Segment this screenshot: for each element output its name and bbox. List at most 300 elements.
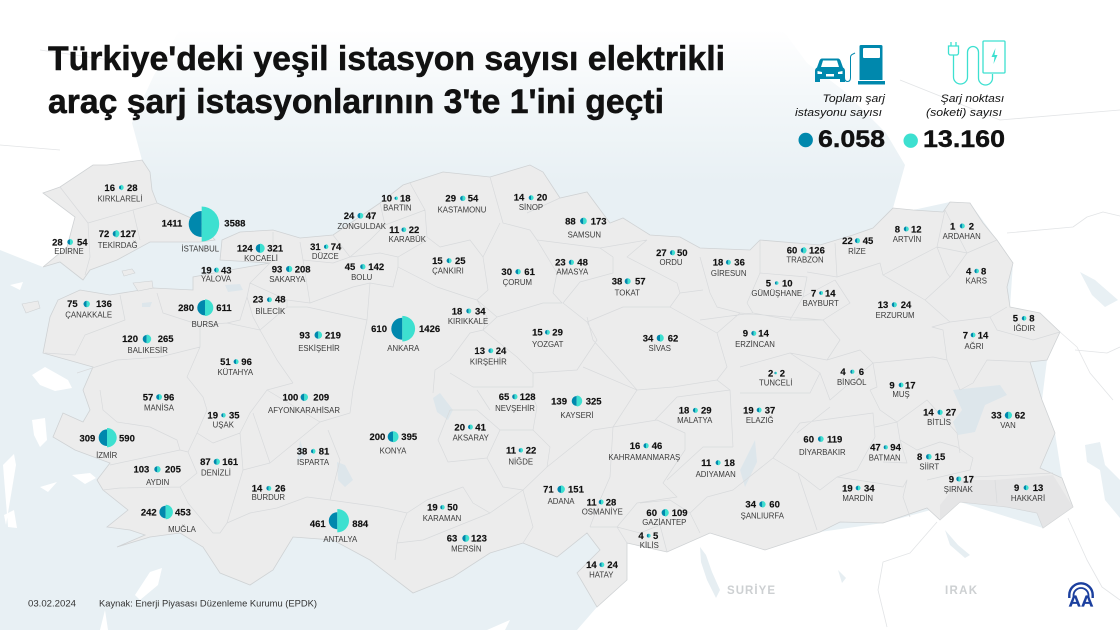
legend: total stations [795,45,886,153]
province: Eskişehir [298,330,341,353]
province: Kilis: 4 [638,531,644,542]
province: Sivas: SİVAS [649,344,671,353]
province: Elazığ: 37 [765,405,775,416]
province: Bolu: BOLU [351,273,373,282]
province: Eskişehir: 219 [325,330,341,341]
province: Antalya [310,509,369,544]
province: Siirt: SİİRT [919,462,939,472]
province: Mardin [842,483,875,503]
province: Kahramanmaraş: 16 [630,441,640,452]
province: Düzce: 74 [331,242,342,253]
province: Isparta: ISPARTA [297,458,330,467]
province: Batman: BATMAN [869,454,901,462]
province: İstanbul: İSTANBUL [182,244,220,254]
province: Kütahya: 51 [220,357,231,368]
province: Edirne: 28 [52,237,63,248]
province: Kırklareli: KIRKLARELİ [97,194,143,203]
province: Kastamonu: KASTAMONU [438,206,487,214]
province: Ordu: 50 [677,248,688,259]
province: Artvin [893,224,922,244]
province: Mersin: MERSİN [451,544,481,554]
province: Denizli: 161 [222,457,239,468]
province: Adana [543,485,585,506]
province: Rize: 45 [863,236,874,247]
province: Afyonkarahisar: AFYONKARAHİSAR [268,406,340,415]
title: araç şarj istasyonlarının 3'te 1'ini geçti [48,83,664,121]
province: Bartın: BARTIN [383,204,412,212]
icon: car and fuel pump [815,45,885,84]
province: Erzincan: 14 [758,329,770,340]
province: Kars: KARS [966,276,987,286]
province: Tunceli [759,368,792,388]
province: Aksaray [453,422,490,442]
province: Sinop [514,193,547,212]
province: Çanakkale [65,299,112,320]
province: Adıyaman: 18 [724,458,735,469]
province: Kütahya: KÜTAHYA [217,368,254,377]
province: Adana: 151 [568,485,585,496]
province: Muş [889,380,916,399]
province: Giresun: 18 [713,258,723,269]
province: Diyarbakır [799,434,846,457]
province: Gaziantep: GAZİANTEP [642,518,686,527]
province: Bayburt: BAYBURT [803,299,839,308]
province: Tunceli: 2 [780,368,785,379]
province: Balıkesir: BALIKESİR [128,346,168,355]
province: Van: 33 [991,411,1002,422]
province: Kırklareli: 28 [127,183,138,194]
province: Niğde: 11 [506,446,517,457]
province: Kahramanmaraş: 46 [652,441,662,452]
icon: plug and battery [948,41,1005,85]
province: Trabzon: TRABZON [786,256,824,264]
province: Muğla: MUĞLA [168,525,197,534]
province: Balıkesir: 120 [122,334,138,345]
province: Tokat: 57 [635,277,646,288]
province: Bolu [345,262,384,282]
province: Ordu: 27 [656,248,667,259]
province: Rize: RİZE [848,247,866,256]
province: Yozgat: 29 [552,328,563,339]
province: Bilecik: BİLECİK [255,307,286,316]
province: Bayburt: 7 [811,288,816,299]
province: Karaman: 19 [427,503,438,514]
province: Sinop: 14 [514,193,525,204]
province: Bayburt: 14 [825,288,836,299]
province: Hakkari: HAKKARİ [1011,494,1045,503]
province: Trabzon [786,246,825,264]
province: İzmir: 590 [119,433,135,444]
province: Zonguldak: ZONGULDAK [337,222,387,231]
province: Düzce [310,242,342,261]
province: Ardahan [943,221,981,241]
province: Bilecik: 23 [253,294,263,306]
province: Isparta: 81 [319,447,330,458]
province: Antalya: 461 [310,519,326,530]
province: Edirne [52,237,88,256]
province: Osmaniye: 28 [606,497,616,508]
province: Balıkesir: 265 [158,334,174,345]
province: Kırşehir: 13 [474,346,485,357]
province: Afyonkarahisar: 209 [313,393,329,404]
Turkey land [43,160,215,280]
province: Erzincan [735,329,775,349]
province: Trabzon: 126 [809,246,825,257]
legend: charge points: (soketi) sayısı [926,107,1002,119]
province: Kars: 4 [966,266,972,277]
province: Konya: 200 [369,432,385,443]
province: Iğdır: IĞDIR [1013,324,1035,333]
province: Ağrı: AĞRI [964,342,984,351]
province: İstanbul: 3588 [224,219,245,230]
province: Ankara: 1426 [419,324,440,335]
province: Sivas: 62 [668,333,678,344]
province: Çankırı: 15 [432,256,443,267]
province: Düzce: DÜZCE [312,252,339,261]
province: Yozgat [532,328,564,349]
province: Ordu: ORDU [660,258,683,267]
province: Antalya: 884 [352,519,369,530]
province: Tekirdağ: 72 [99,229,109,240]
province: Aydın [133,465,182,487]
province: Kars [966,266,987,286]
province: Burdur: 14 [252,484,263,495]
province: İzmir [79,428,135,460]
province: Giresun: GİRESUN [711,269,746,278]
province: Kırşehir [470,346,507,366]
province: Sinop: 20 [537,193,547,204]
province: Zonguldak: 47 [366,211,376,222]
province: Karabük: 11 [389,225,400,236]
province: Hatay: 14 [586,560,597,571]
province: Osmaniye: 11 [587,497,597,508]
province: Artvin: 12 [911,224,922,235]
province: Karaman [423,503,461,523]
province: Giresun [711,258,746,278]
province: Malatya: 18 [679,406,689,417]
legend: total stations: Toplam şarj [822,93,886,105]
province: Mardin: 34 [864,483,875,494]
province: Denizli: 87 [200,457,211,468]
province: Bitlis: 27 [946,408,956,419]
province: Kahramanmaraş [608,441,680,462]
province: Muğla: 453 [175,507,191,518]
province: Uşak: 35 [229,411,240,422]
province: Kırıkkale: 18 [452,306,462,317]
province: Mersin: 63 [447,534,457,545]
province: Gaziantep: 60 [646,508,657,519]
province: Adana: ADANA [548,497,575,506]
province: Denizli: DENİZLİ [201,468,231,478]
province: Malatya [677,406,713,425]
province: Kırşehir: 24 [496,346,507,357]
province: Zonguldak [337,211,387,231]
province: Van: 62 [1015,411,1025,422]
legend: charge points: 13.160 [923,126,1005,153]
legend: charge points: Şarj noktası [941,93,1004,105]
province: Tekirdağ: 127 [120,229,136,240]
province: Şanlıurfa [741,500,785,520]
province: Malatya: 29 [701,406,712,417]
province: Nevşehir: 65 [499,392,510,403]
province: Aksaray: AKSARAY [453,434,490,442]
province: Muş: 17 [905,380,916,391]
province: Uşak: 19 [207,411,218,422]
province: Şırnak: 9 [949,474,954,485]
province: Çankırı: ÇANKIRI [432,266,464,276]
province: Kırklareli [97,183,143,203]
title: Türkiye'deki yeşil istasyon sayısı elektrikli [48,40,725,78]
province: Samsun: 173 [591,216,607,227]
province: Amasya: AMASYA [556,268,589,276]
province: Manisa: 96 [164,392,174,403]
province: Elazığ [743,405,775,425]
province: Kırıkkale [448,306,488,326]
province: Ankara: ANKARA [387,344,420,353]
province: Muğla: 242 [141,507,157,518]
province: Siirt [917,452,946,472]
province: Ardahan: 2 [969,221,974,232]
province: Sakarya [269,264,311,284]
province: Hakkari: 9 [1014,483,1019,494]
province: Sakarya: 93 [272,264,282,275]
province: Malatya: MALATYA [677,416,713,425]
province: Karaman: 50 [447,503,458,514]
province: Sivas [643,333,678,353]
province: Sakarya: 208 [295,264,311,275]
province: Konya [369,431,418,456]
province: Bayburt [803,288,839,308]
province: Adıyaman: ADIYAMAN [696,470,736,479]
province: İstanbul: 1411 [162,219,183,230]
province: Karabük [389,225,427,244]
province: Kayseri: KAYSERİ [560,411,594,420]
province: Gaziantep [642,508,688,527]
province: Aydın: 103 [133,465,149,476]
province: Mersin: 123 [471,534,487,545]
province: Ağrı: 7 [963,330,968,341]
province: Muş: 9 [889,380,895,391]
province: Siirt: 8 [917,452,922,463]
province: Amasya [555,258,589,276]
province: Sivas: 34 [643,333,654,344]
province: Burdur: BURDUR [252,493,285,502]
province: Bitlis: 14 [923,408,934,419]
province: Bilecik [253,294,286,316]
province: Hakkari: 13 [1033,483,1043,494]
province: Şırnak: ŞIRNAK [944,485,974,494]
province: Karabük: KARABÜK [389,235,427,244]
province: Bartın [381,194,412,212]
province: Konya: 395 [401,432,418,443]
province: Erzurum: 13 [878,300,888,311]
province: Düzce: 31 [310,242,321,253]
province: Nevşehir: NEVŞEHİR [495,404,535,413]
province: Hatay: 24 [607,560,619,571]
province: Ankara [371,316,440,353]
province: Kocaeli: 321 [267,244,284,255]
province: Osmaniye [582,497,623,516]
province: Kars: 8 [981,266,986,277]
province: Edirne: 54 [77,237,88,248]
province: Balıkesir [122,334,174,355]
province: İstanbul [162,206,245,254]
province: Kastamonu: 54 [468,194,479,205]
province: Tokat: TOKAT [615,288,640,298]
province: Mardin: 19 [842,483,853,494]
province: Çanakkale: ÇANAKKALE [65,310,112,320]
province: Afyonkarahisar [268,393,340,415]
province: Uşak [207,411,240,430]
province: Erzurum: ERZURUM [876,311,914,320]
province: Gümüşhane [751,278,802,298]
province: Samsun [565,216,607,240]
province: Çankırı [432,256,466,276]
province: Iğdır: 8 [1029,314,1035,325]
province: Kocaeli: KOCAELİ [244,254,278,263]
province: Yozgat: YOZGAT [532,340,564,349]
province: Kayseri [551,396,602,420]
province: Kastamonu: 29 [445,194,456,205]
province: Bursa [178,299,232,329]
province: Diyarbakır: 119 [827,434,842,445]
province: Şırnak [944,474,974,494]
province: Artvin: ARTVİN [893,235,921,244]
province: Niğde [506,446,536,466]
province: Rize: 22 [842,236,853,247]
province: Yalova: 43 [221,265,232,276]
province: Bursa: 280 [178,303,194,314]
province: Burdur: 26 [275,484,286,495]
province: Uşak: UŞAK [213,420,235,430]
province: Zonguldak: 24 [344,211,355,222]
province: Eskişehir: ESKİŞEHİR [298,344,340,353]
province: Muğla [141,505,197,534]
province: Kocaeli: 124 [237,244,253,255]
province: Manisa: 57 [143,392,153,403]
province: Aydın: 205 [165,465,182,476]
province: Isparta [297,447,330,467]
province: Adıyaman: 11 [701,458,712,469]
province: Elazığ: ELAZIĞ [746,416,774,425]
province: Yozgat: 15 [532,328,543,339]
province: Kocaeli [237,244,284,263]
province: Gümüşhane: 10 [782,278,793,289]
province: Isparta: 38 [297,447,307,458]
source: Kaynak: Enerji Piyasası Düzenleme Kurumu (EPDK) [99,598,317,610]
province: Sakarya: SAKARYA [269,275,306,284]
province: Batman: 94 [890,443,902,454]
province: Çorum: 30 [501,267,512,278]
legend: total stations: 6.058 [818,126,885,153]
province: Ardahan: 1 [950,221,956,232]
icon: AA logo [1068,583,1094,610]
province: Hatay: HATAY [589,570,614,580]
province: Aksaray: 41 [475,422,487,433]
province: Batman: 47 [870,443,881,454]
province: Artvin: 8 [895,224,900,235]
province: Edirne: EDİRNE [54,247,84,256]
province: Erzincan: ERZİNCAN [735,340,775,349]
province: Çorum: 61 [524,267,536,278]
province: Kırklareli: 16 [104,183,115,194]
province: Ankara: 610 [371,324,387,335]
province: Gümüşhane: 5 [766,278,772,289]
province: İzmir: 309 [79,433,95,444]
legend: total stations: istasyonu sayısı [795,107,882,119]
province: Tokat [612,277,646,298]
label: Suriye: SURİYE [727,584,775,597]
date: 03.02.2024 [28,598,77,610]
province: Şanlıurfa: ŞANLIURFA [741,512,785,520]
province: Giresun: 36 [734,258,745,269]
province: Ağrı: 14 [978,330,989,341]
province: Kırşehir: KIRŞEHİR [470,358,507,366]
province: Adıyaman [696,458,736,479]
province: Diyarbakır: 60 [803,434,814,445]
province: Çanakkale: 136 [96,299,112,310]
province: Tunceli: TUNCELİ [759,378,792,388]
province: Bartın: 18 [400,194,411,205]
province: Yalova: YALOVA [201,274,232,284]
province: Bursa: BURSA [192,320,219,329]
province: Kahramanmaraş: KAHRAMANMARAŞ [608,453,680,462]
province: Şanlıurfa: 60 [769,500,780,511]
province: Bingöl: BİNGÖL [837,378,867,387]
province: Bingöl: 6 [859,367,864,378]
icon: AA logo: AA [1068,594,1094,610]
province: Hakkari [1011,483,1045,503]
province: Kırıkkale: KIRIKKALE [448,317,488,326]
province: Mardin: MARDİN [842,494,873,503]
province: Bitlis: BİTLİS [927,418,951,427]
province: Burdur [252,484,286,502]
province: Adana: 71 [543,485,554,496]
province: Van [991,411,1025,430]
province: Samsun: 88 [565,216,576,227]
province: Iğdır [1013,314,1035,333]
province: Amasya: 23 [555,258,566,269]
province: Şırnak: 17 [963,474,974,485]
province: Siirt: 15 [935,452,946,463]
province: Rize [842,236,874,256]
province: Kayseri: 139 [551,396,567,407]
province: Kayseri: 325 [586,396,602,407]
province: Sinop: SİNOP [519,203,543,212]
province: İzmir: İZMİR [96,451,118,460]
province: Ardahan: ARDAHAN [943,232,981,241]
province: Karaman: KARAMAN [423,514,461,523]
province: Manisa: MANİSA [144,404,175,412]
province: Hatay [586,560,619,580]
province: Osmaniye: OSMANİYE [582,508,623,516]
province: Iğdır: 5 [1013,314,1019,325]
province: Konya: KONYA [380,446,407,456]
province: Bartın: 10 [381,194,392,205]
province: Kütahya [217,357,254,377]
province: Gaziantep: 109 [672,508,688,519]
province: Trabzon: 60 [787,246,797,257]
province: Kastamonu [438,194,487,214]
province: Nevşehir: 128 [520,392,536,403]
province: Niğde: NİĞDE [508,458,533,466]
province: Çankırı: 25 [455,256,466,267]
province: Gümüşhane: GÜMÜŞHANE [751,289,802,298]
province: Erzurum: 24 [901,300,912,311]
province: Manisa [143,392,175,412]
province: Çorum [501,267,536,287]
label: Irak: IRAK [945,585,978,597]
